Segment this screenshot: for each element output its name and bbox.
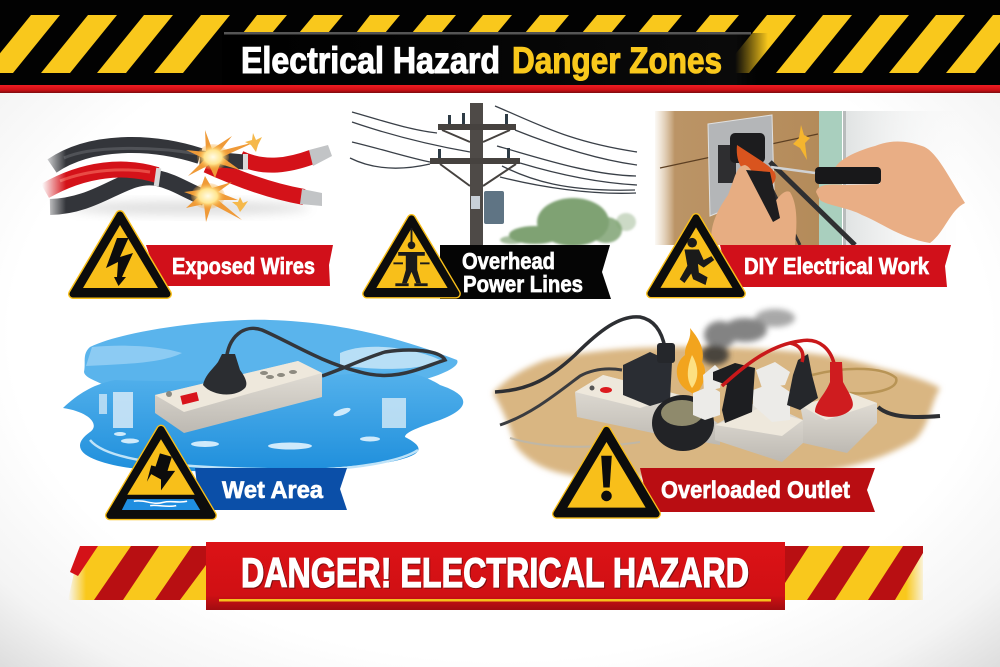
red plug — [815, 362, 853, 417]
power strips — [575, 375, 720, 445]
black transformer — [623, 352, 672, 406]
transformer — [484, 191, 504, 224]
plug — [203, 354, 246, 394]
flame — [677, 328, 705, 395]
accent line — [219, 599, 771, 602]
left hand — [711, 165, 796, 245]
utility pole — [470, 103, 483, 245]
pedestals in water — [99, 392, 406, 428]
illustration: exposed wires — [45, 130, 332, 222]
black adapter — [713, 363, 755, 423]
cup ring — [652, 395, 714, 451]
illustration: overhead power lines — [350, 103, 637, 246]
label text — [462, 248, 583, 297]
tree — [500, 198, 636, 246]
power strip — [155, 361, 322, 433]
warning sign: exclamation — [557, 430, 656, 514]
red rule — [0, 85, 1000, 93]
spark lower — [184, 176, 242, 222]
hazard stripes — [0, 15, 1000, 73]
label: overhead power lines — [440, 245, 611, 299]
illustration: DIY electrical work — [655, 111, 965, 245]
title: Danger Zones — [512, 40, 722, 81]
label: overloaded outlet — [640, 468, 875, 512]
warning sign: person with tool — [651, 218, 741, 294]
hazard tape: right — [785, 546, 923, 600]
white adapters — [693, 386, 720, 420]
illustration: wet area — [63, 320, 463, 471]
screwdriver — [815, 167, 881, 184]
banner text: DANGER! ELECTRICAL HAZARD — [241, 549, 749, 596]
cords — [495, 317, 940, 447]
red cords — [722, 340, 835, 386]
spark upper — [186, 130, 255, 178]
label: exposed wires — [146, 245, 333, 286]
label text: Wet Area — [222, 477, 324, 504]
warning sign: electricity and water — [110, 430, 212, 515]
hazard tape: left — [68, 546, 206, 600]
warning sign: person on pole — [367, 219, 456, 294]
label text: Power Lines — [463, 271, 583, 297]
title plate — [222, 32, 768, 85]
header band — [0, 0, 1000, 93]
label text: Exposed Wires — [172, 253, 315, 279]
danger banner — [206, 542, 785, 610]
wall plate — [708, 115, 774, 216]
right hand — [816, 142, 965, 243]
black plug — [787, 354, 818, 410]
spark — [793, 125, 810, 160]
title — [241, 40, 722, 81]
label: DIY electrical work — [720, 245, 951, 287]
title: Electrical Hazard — [241, 40, 500, 81]
label text: Overloaded Outlet — [661, 477, 850, 504]
warning sign: high voltage — [73, 215, 167, 294]
power cord — [226, 328, 445, 376]
plug and pliers — [730, 133, 765, 163]
label: wet area — [195, 468, 347, 510]
smoke — [701, 309, 795, 365]
illustration: overloaded outlet — [493, 309, 940, 478]
label text: DIY Electrical Work — [744, 253, 930, 279]
label text: Overhead — [462, 248, 555, 274]
